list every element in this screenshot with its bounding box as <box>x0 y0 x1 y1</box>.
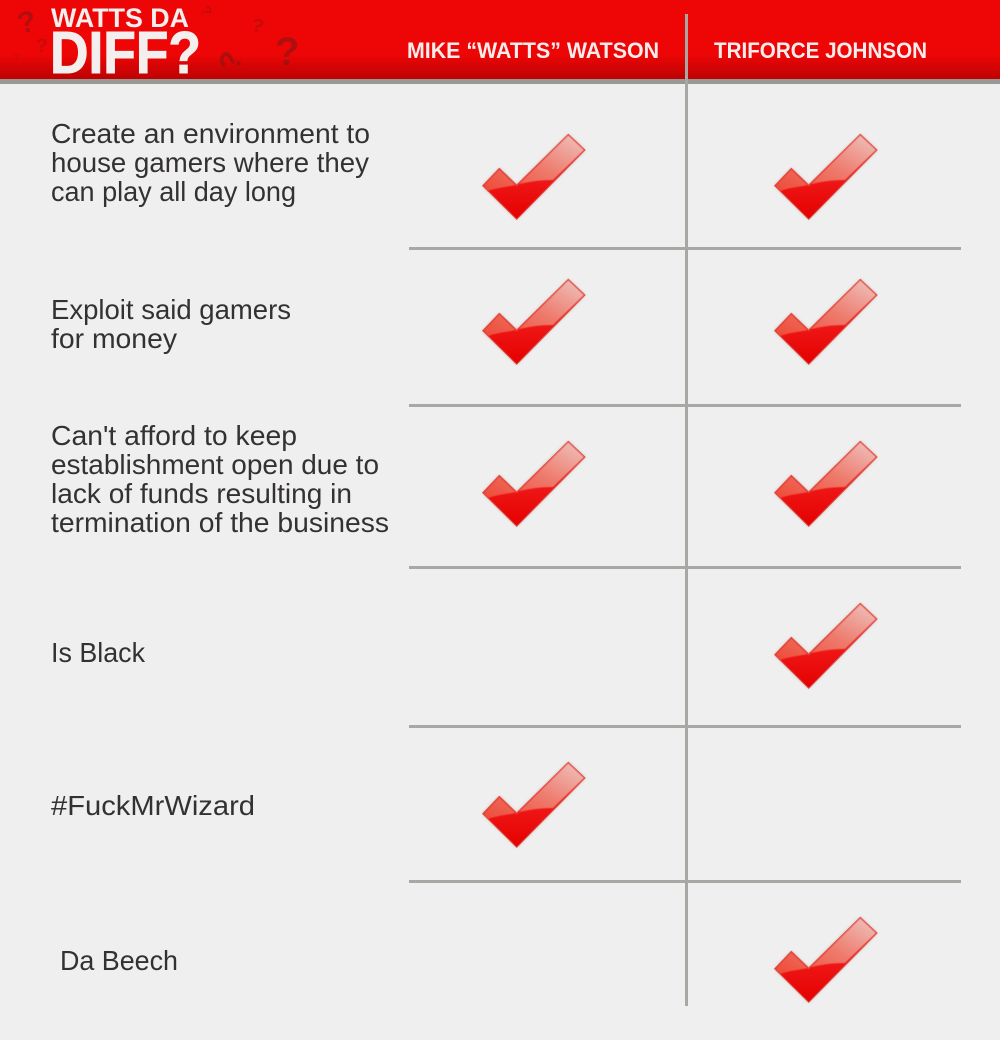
row 1 label: house gamers where they <box>51 147 369 178</box>
row 6 check: Triforce <box>775 917 877 1002</box>
decorative question marks <box>14 3 299 74</box>
decorative question marks: ? <box>213 48 250 74</box>
decorative question marks: ? <box>198 3 216 19</box>
row 3 check: Mike <box>483 441 585 526</box>
row 2 check: Triforce <box>775 279 877 364</box>
row 1 check: Triforce <box>775 134 877 219</box>
row 3 check: Triforce <box>775 441 877 526</box>
row 5 label: #FuckMrWizard <box>51 790 255 821</box>
row 2 label: for money <box>51 323 177 354</box>
row 2 check: Mike <box>483 279 585 364</box>
row 3 label: lack of funds resulting in <box>51 478 352 509</box>
row 6 label: Da Beech <box>60 945 178 976</box>
decorative question marks: ? <box>14 5 39 41</box>
row 3 label: establishment open due to <box>51 449 379 480</box>
row 1 label: Create an environment to <box>51 118 370 149</box>
row 2 label <box>51 294 291 354</box>
row 1 check: Mike <box>483 134 585 219</box>
row 4 check: Triforce <box>775 603 877 688</box>
row 1 label <box>51 118 370 207</box>
row 3 label <box>51 420 389 538</box>
title: DIFF? <box>50 20 201 86</box>
row 2 label: Exploit said gamers <box>51 294 291 325</box>
decorative question marks: ? <box>249 15 266 38</box>
decorative question marks: ? <box>275 30 299 74</box>
decorative question marks: ? <box>14 53 19 62</box>
column heading: Mike Watson: MIKE “WATTS” WATSON <box>407 38 659 63</box>
row 4 label: Is Black <box>51 637 146 668</box>
row 1 label: can play all day long <box>51 176 296 207</box>
header banner <box>0 0 1000 84</box>
row 3 label: termination of the business <box>51 507 389 538</box>
row 3 label: Can't afford to keep <box>51 420 297 451</box>
column heading: Triforce Johnson: TRIFORCE JOHNSON <box>714 38 927 63</box>
title: WATTS DA <box>51 3 189 33</box>
row 5 check: Mike <box>483 762 585 847</box>
grid lines <box>409 14 961 1006</box>
decorative question marks: ? <box>36 36 48 57</box>
